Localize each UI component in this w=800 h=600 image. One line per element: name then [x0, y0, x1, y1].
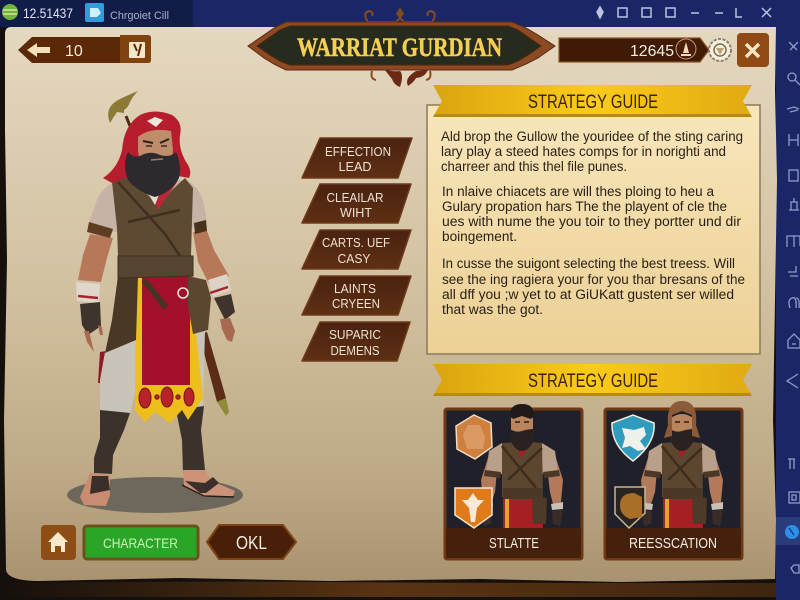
yellow apron: [135, 276, 203, 423]
hero portrait: [481, 414, 563, 528]
red flap behind: [98, 350, 112, 384]
body text: In cusse the suigont selecting the best treess. Will: [442, 256, 735, 271]
icon: brown shield: [615, 487, 645, 528]
icon: settings gear: [709, 39, 731, 61]
left legging: [94, 410, 130, 474]
body text: boingement.: [442, 229, 517, 244]
back button panel: [18, 35, 151, 63]
title plaque: WARRIAT GURDIAN: [297, 33, 502, 62]
body text: all dff you ;w yet to at GiUKatt gustent ser willed: [442, 287, 734, 302]
beard: [125, 152, 180, 197]
icon: app tile: [85, 3, 104, 22]
tag: effection lead: [302, 138, 412, 178]
close button: [737, 33, 769, 67]
menu tags: [302, 138, 412, 361]
warrior character: [67, 91, 243, 513]
right legging: [176, 406, 205, 473]
body text: Ald brop the Gullow the youridee of the sting caring: [441, 129, 743, 144]
strategy guide banner bottom: STRATEGY GUIDE: [528, 371, 658, 392]
left hip cloth: [105, 276, 138, 353]
okl button: [207, 525, 296, 559]
body text: that was the got.: [442, 302, 543, 317]
red apron cloth: [142, 276, 190, 385]
strategy guide banner top: [433, 85, 752, 117]
fingers: [84, 318, 235, 352]
clock text: 12.51437: [23, 6, 73, 21]
strategy guide banner bottom: [433, 364, 752, 396]
bottom left home button: [41, 525, 76, 560]
tag: suparic demens: [302, 322, 410, 361]
tag: laints cryeen: CRYEEN: [332, 296, 380, 311]
icon: blue shield: [612, 415, 654, 461]
app name: Chrgoiet Cill: [110, 10, 169, 22]
bottom wood floor: [0, 582, 776, 597]
strategy guide banner top: STRATEGY GUIDE: [528, 92, 658, 113]
body text: see the ing ragiera your for you thar bresans of the: [442, 272, 745, 287]
left arm: [78, 234, 113, 282]
card: reesscation: [605, 401, 742, 559]
icon: blue badge: [785, 525, 799, 539]
top system bar: [0, 0, 800, 27]
icon: coin: [676, 39, 696, 59]
hero portrait: [641, 414, 723, 528]
card: stlatte: [445, 404, 582, 559]
icon: house: [48, 532, 68, 552]
trousers: [100, 330, 205, 414]
vest: [112, 177, 193, 256]
icon: orange hex: [456, 415, 492, 459]
ornament top: [365, 11, 435, 22]
tag: effection lead: LEAD: [338, 159, 372, 174]
body text: charreer and this thel file punes.: [441, 159, 627, 174]
hood highlight: [147, 117, 163, 127]
belt buckle: [178, 288, 188, 298]
body text: [441, 129, 745, 317]
icon: slash tile: [129, 42, 145, 58]
tag: carts uef casy: CARTS. UEF: [322, 235, 390, 250]
okl button: OKL: [236, 533, 267, 553]
tag: cleailar wiht: WIHT: [340, 205, 372, 220]
tag: cleailar wiht: CLEAILAR: [326, 190, 384, 205]
body text: lary play a steed hates comps for in norighti and: [441, 144, 726, 159]
currency bar: [559, 38, 709, 62]
sword: [199, 332, 229, 416]
character button: [84, 526, 198, 559]
tag: cleailar wiht: [302, 184, 411, 223]
right pouch: [188, 276, 211, 334]
card label: STLATTE: [489, 535, 539, 552]
tag: carts uef casy: CASY: [338, 251, 371, 266]
belt: [118, 256, 193, 278]
tag: carts uef casy: [302, 230, 411, 269]
tag: laints cryeen: LAINTS: [334, 281, 376, 296]
apron emblems: [139, 387, 194, 408]
tag: laints cryeen: [302, 276, 411, 315]
body text: ues with nume the you toir to they portter und dir: [442, 214, 742, 229]
arm bands: [87, 222, 113, 238]
tag: effection lead: EFFECTION: [325, 144, 391, 159]
body text: In nlaive chiacets are will thes ploing to heu a: [442, 184, 715, 199]
right arm: [193, 231, 229, 284]
right foot: [183, 470, 235, 497]
plume: [108, 91, 138, 126]
shirt: [89, 180, 207, 232]
face: [138, 130, 173, 165]
card label: REESSCATION: [629, 535, 717, 552]
window controls: [597, 7, 799, 18]
wrist wraps: [76, 282, 100, 303]
left foot: [80, 473, 110, 506]
red hood: [103, 112, 190, 183]
icon: arrow: [27, 43, 50, 57]
currency value: 12645: [630, 43, 674, 60]
active item highlight: [776, 517, 800, 545]
title plaque: [248, 7, 555, 87]
level number: 10: [65, 43, 83, 60]
body text: Gulary propation hars The the playent of cle the: [442, 199, 727, 214]
ground shadow: [67, 477, 243, 513]
gloves: [80, 302, 101, 335]
right sidebar: [776, 0, 800, 600]
tag: suparic demens: DEMENS: [330, 343, 380, 358]
icon: orange shield: [455, 488, 492, 528]
tag: suparic demens: SUPARIC: [329, 327, 381, 342]
ornament bottom: [384, 69, 428, 87]
strategy guide text panel: [427, 105, 760, 354]
icon: green status coin: [2, 4, 18, 20]
character button: CHARACTER: [103, 536, 178, 551]
